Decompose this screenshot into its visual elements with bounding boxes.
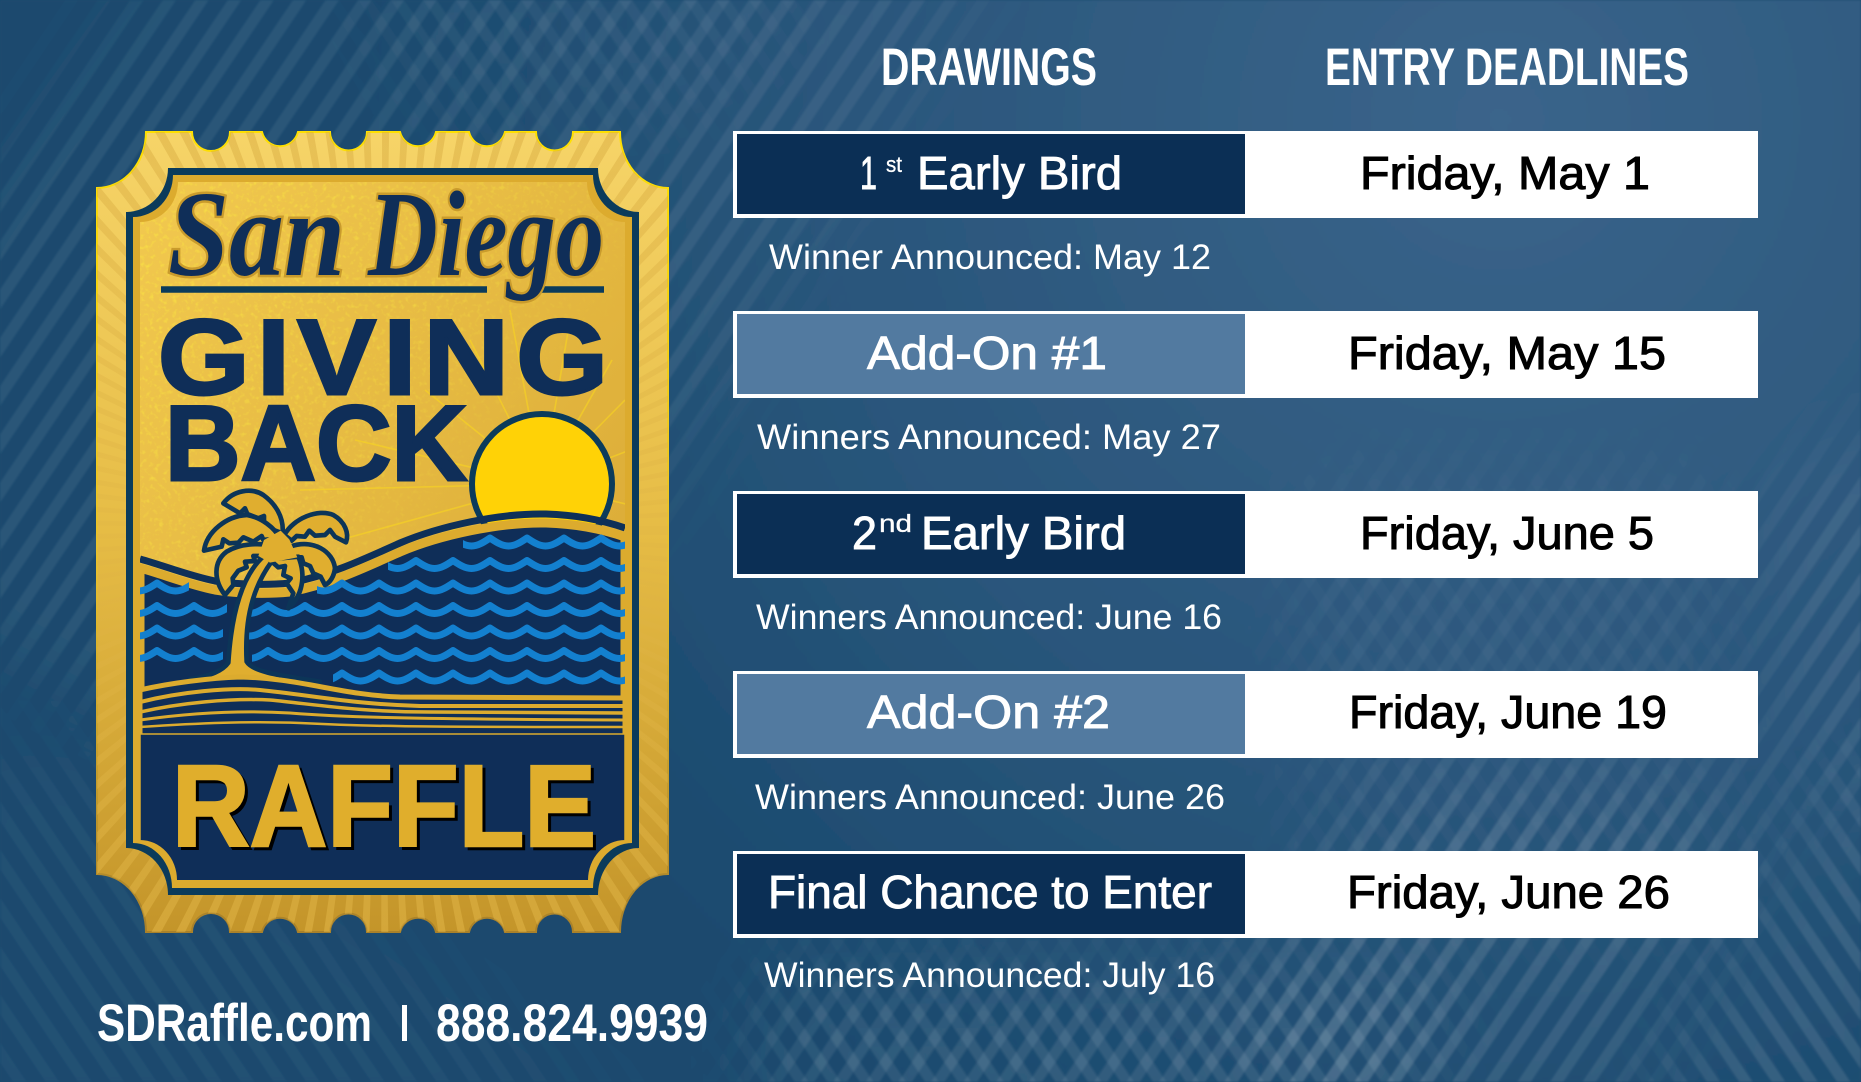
scene panel: [140, 182, 630, 884]
row: 2nd Early Bird: 2: [852, 507, 877, 559]
row: 2nd Early Bird: nd: [879, 510, 912, 538]
footer contact line: SDRaffle.com: [97, 994, 372, 1053]
San Diego script title: San: [168, 167, 345, 302]
row: Add-On #1: Add-On #1: [867, 327, 1107, 379]
ticket navy inner border: [126, 168, 639, 895]
row: Add-On #2: [733, 671, 1758, 758]
note: winners announced July 16: Winners Announced: July 16: [764, 956, 1215, 995]
row: 1st Early Bird: Early Bird: [917, 147, 1122, 199]
footer contact line: 888.824.9939: [436, 994, 708, 1053]
row: 1st Early Bird: Friday, May 1: [1360, 147, 1650, 199]
row: Add-On #2: Add-On #2: [867, 686, 1110, 738]
San Diego script title: [161, 167, 604, 302]
ticket gold inner border: [133, 175, 632, 888]
GIVING heading: GIVING: [158, 297, 608, 417]
row: 2nd Early Bird: [733, 491, 1758, 578]
footer contact line: [97, 994, 708, 1053]
note: winners announced June 16: Winners Announced: June 16: [756, 598, 1222, 637]
waves: [140, 532, 625, 689]
sun rays: [300, 310, 625, 538]
note: winners announced June 26: Winners Announced: June 26: [755, 778, 1225, 817]
row: 2nd Early Bird: Friday, June 5: [1360, 507, 1654, 559]
beach lines: [140, 677, 625, 740]
column heading: entry deadlines: ENTRY DEADLINES: [1325, 38, 1689, 97]
row: Final Chance to Enter: Friday, June 26: [1347, 866, 1670, 918]
row: 1st Early Bird: st: [886, 152, 902, 177]
RAFFLE heading: RAFFLE: [172, 741, 596, 871]
note: winner announced May 12: Winner Announced: May 12: [769, 238, 1211, 277]
sun: [469, 411, 615, 526]
column heading: drawings: DRAWINGS: [881, 38, 1097, 97]
BACK heading: BACK: [165, 383, 467, 503]
row: Add-On #1: [733, 311, 1758, 398]
palm tree: [190, 491, 347, 682]
row: Final Chance to Enter: [733, 851, 1758, 938]
ticket gold body: [97, 132, 668, 932]
row: Final Chance to Enter: Final Chance to Enter: [768, 866, 1212, 918]
navy raffle band: [140, 734, 625, 884]
panel: raffle ticket logo: [97, 132, 668, 932]
row: Add-On #1: Friday, May 15: [1348, 327, 1666, 379]
San Diego script title: Diego: [367, 167, 604, 302]
row: 1st Early Bird: [733, 131, 1758, 218]
row: Add-On #2: Friday, June 19: [1349, 686, 1667, 738]
divider line: [161, 286, 604, 293]
row: 2nd Early Bird: Early Bird: [921, 507, 1126, 559]
sea: [140, 510, 625, 696]
sky with speckle: [140, 182, 625, 602]
row: 1st Early Bird: 1: [860, 147, 877, 199]
note: winners announced May 27: Winners Announced: May 27: [757, 418, 1221, 457]
